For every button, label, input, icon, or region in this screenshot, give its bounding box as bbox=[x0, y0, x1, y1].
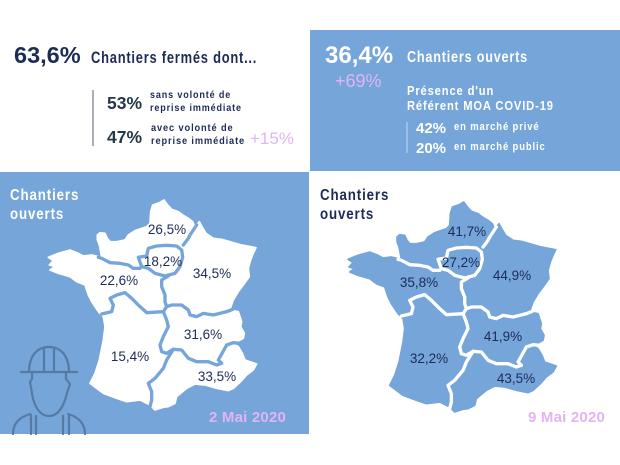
panel: map 2 May background bbox=[0, 172, 309, 434]
public market figure: 20% bbox=[416, 140, 446, 157]
public market label: en marché public bbox=[454, 141, 546, 153]
map values: 31,6% bbox=[184, 327, 222, 342]
map values bbox=[400, 224, 535, 386]
47 percent label: reprise immédiate bbox=[151, 135, 245, 147]
map values: 26,5% bbox=[148, 222, 186, 237]
region borders bbox=[398, 227, 539, 409]
map values: 27,2% bbox=[442, 255, 480, 270]
closed sites breakdown bbox=[107, 89, 294, 148]
map values: 22,6% bbox=[100, 273, 138, 288]
53 percent figure: 53% bbox=[107, 93, 142, 113]
47 percent label: avec volonté de bbox=[151, 122, 234, 134]
right map title: ouverts bbox=[320, 206, 374, 223]
region borders bbox=[98, 225, 239, 407]
map values: 34,5% bbox=[193, 266, 231, 281]
silhouette of France bbox=[348, 202, 556, 412]
plus 69 percent: +69% bbox=[335, 71, 382, 91]
closed sites percentage: 63,6% bbox=[14, 42, 81, 68]
private market figure: 42% bbox=[416, 120, 446, 137]
map values: 33,5% bbox=[198, 369, 236, 384]
map values: 32,2% bbox=[410, 351, 448, 366]
map values: 41,7% bbox=[448, 224, 486, 239]
closed sites heading: Chantiers fermés dont... bbox=[91, 48, 257, 67]
COVID referent text: Présence d'un bbox=[407, 83, 494, 98]
map values: 15,4% bbox=[111, 349, 149, 364]
left map title: ouverts bbox=[10, 206, 64, 223]
left map title: Chantiers bbox=[10, 187, 79, 204]
left map title bbox=[10, 187, 79, 223]
right map date: 9 Mai 2020 bbox=[528, 409, 605, 426]
map: France 2 May bbox=[48, 200, 257, 410]
53 percent label: sans volonté de bbox=[150, 89, 231, 101]
open sites percentage: 36,4% bbox=[325, 42, 393, 69]
right map title: Chantiers bbox=[320, 187, 389, 204]
panel: chantiers ouverts summary bbox=[310, 30, 620, 171]
53 percent label bbox=[150, 89, 242, 114]
COVID referent text: Référent MOA COVID-19 bbox=[407, 98, 554, 113]
icon: construction worker bbox=[13, 347, 85, 434]
53 percent label: reprise immédiate bbox=[150, 102, 242, 114]
map values: 41,9% bbox=[484, 329, 522, 344]
map values: 35,8% bbox=[400, 275, 438, 290]
plus 15 percent: +15% bbox=[250, 129, 294, 148]
map values bbox=[100, 222, 236, 384]
47 percent figure: 47% bbox=[107, 127, 142, 147]
map values: 44,9% bbox=[493, 268, 531, 283]
map values: 18,2% bbox=[144, 254, 182, 269]
map: France 9 May bbox=[348, 202, 556, 412]
silhouette of France bbox=[48, 200, 257, 410]
private market label: en marché privé bbox=[454, 121, 539, 133]
right map title bbox=[320, 187, 389, 223]
map values: 43,5% bbox=[497, 371, 535, 386]
COVID referent text bbox=[407, 83, 554, 113]
left map date: 2 Mai 2020 bbox=[209, 409, 286, 426]
open sites heading: Chantiers ouverts bbox=[407, 49, 528, 66]
47 percent label bbox=[151, 122, 245, 147]
